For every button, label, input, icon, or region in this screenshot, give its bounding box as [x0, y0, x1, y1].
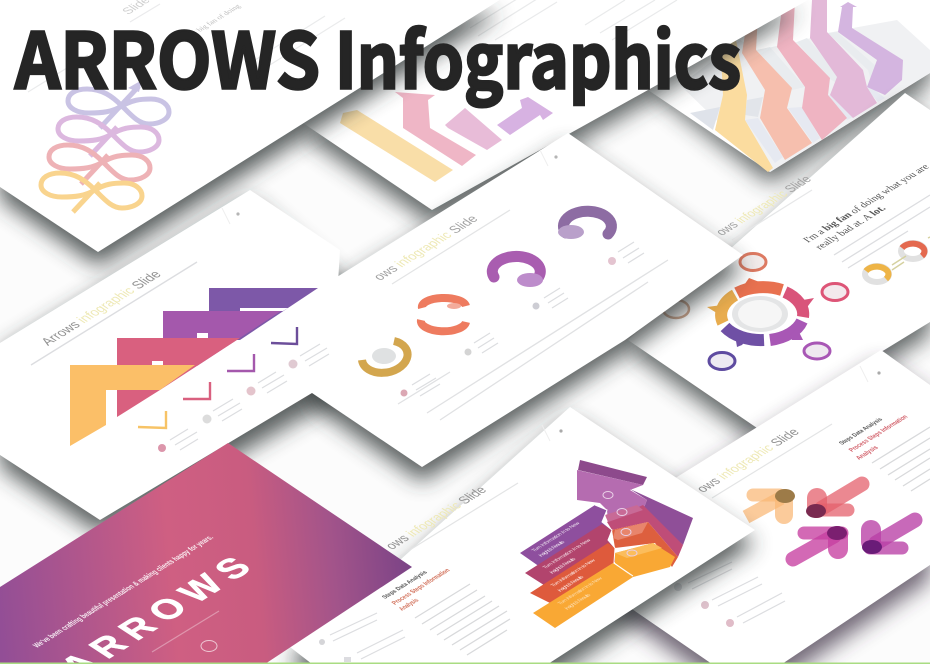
knot: pink: [49, 145, 150, 184]
slide: 3D stacked arrow: [290, 407, 755, 664]
step labels: [319, 613, 405, 662]
slide title: Arrows infographic Slide: [37, 268, 165, 348]
chevron labels: [158, 344, 329, 452]
ribbon text: Turn Information In to New: [531, 521, 582, 553]
ring: gold: [362, 341, 408, 373]
arrow group: purple: [862, 520, 915, 554]
ring: coral: [740, 254, 766, 270]
arrow: violet: [810, 0, 877, 118]
slide title: ows infographic Slide: [693, 426, 802, 495]
ribbon text: Turn Information In to New: [542, 538, 593, 570]
heading: process line 1: Process Steps Information: [848, 414, 910, 453]
ring: magenta: [492, 256, 543, 287]
ribbon: purple: [520, 505, 612, 567]
ring: magenta: [804, 343, 830, 359]
corner marks: [138, 327, 297, 428]
slide: rising arrows: [303, 0, 808, 224]
slide: tall zigzag arrows: [648, 0, 930, 184]
slide marker: [542, 425, 563, 441]
knot: lavender: [68, 86, 169, 128]
ribbon text: [531, 521, 604, 611]
step labels: [674, 562, 785, 627]
cover tagline: We've been crafting beautiful presentation & making clients happy for years.: [30, 533, 215, 649]
chevron: orange: [70, 365, 195, 446]
slide: circular wheel: [628, 93, 930, 442]
slide marker: [222, 208, 240, 224]
body lines: [415, 584, 510, 655]
chevron: rose: [117, 338, 240, 417]
3D arrow: [520, 460, 693, 628]
arrow group: orange: [746, 489, 795, 517]
ring: coral: [421, 298, 466, 331]
chevron: magenta: [163, 311, 281, 366]
heading: process line 2: Analysis: [855, 445, 880, 461]
body lines: [872, 427, 930, 491]
slide: C-shaped ring arrows: [300, 133, 743, 482]
knot: violet: [58, 117, 159, 156]
slide title: ows infographic Slide: [370, 213, 481, 283]
title: [14, 0, 741, 112]
chevron: purple: [209, 288, 318, 340]
arrow: rose: [777, 0, 847, 140]
title: ARROWS: [14, 0, 320, 112]
cover icon: [201, 640, 217, 652]
quote line 2: really bad at. A lot.: [813, 204, 889, 252]
slide title: ows infographic Slide: [382, 484, 490, 552]
ribbon: orange: [533, 563, 633, 628]
arrow: yellow: [715, 35, 773, 172]
ring: rose: [822, 284, 848, 300]
ribbon text: Insight & Results: [557, 575, 586, 593]
ribbon text: Insight & Results: [549, 557, 578, 575]
knot: orange: [41, 173, 142, 212]
ribbon text: Insight & Results: [564, 593, 593, 611]
ring: purple: [558, 211, 611, 239]
subtitle line: [31, 262, 197, 365]
slide quote: top left: big fan of doing: [194, 3, 243, 33]
ring: gold-brown partly hidden: [663, 300, 689, 318]
ring: purple: [709, 352, 735, 370]
ribbon text: Turn Information In to New: [557, 576, 604, 606]
arrow tip on lavender knot: [128, 80, 142, 92]
body lines: [834, 195, 930, 268]
slide title: ows infographic Slide: [712, 173, 815, 238]
paragraph lines: [398, 260, 668, 420]
heading: process line 2: Analysis: [398, 598, 421, 612]
donut labels: [892, 237, 930, 270]
slide: converging arrows: [600, 350, 930, 664]
arrow: salmon: [742, 7, 812, 160]
arrow group: magenta: [793, 526, 847, 559]
icon labels: [400, 242, 644, 396]
slide: chevron arrows: [0, 190, 340, 520]
heading: process line 1: Process Steps Information: [391, 568, 452, 606]
donut: coral: [901, 243, 925, 259]
arrow: lavender: [838, 2, 903, 95]
title: Infographics: [335, 0, 741, 112]
slide: infinity knots: [0, 0, 500, 266]
ribbon text: Turn Information In to New: [550, 558, 597, 588]
slide marker: [540, 150, 558, 166]
slide marker: [860, 366, 881, 382]
cover sub line: [152, 611, 219, 652]
slide: pink cover: [0, 443, 412, 664]
donut: gold: [865, 266, 889, 282]
wheel: [707, 278, 814, 347]
heading: steps: Steps Data Analysis: [381, 570, 429, 600]
bottom edge line: [0, 662, 930, 664]
heading: steps: Steps Data Analysis: [838, 417, 885, 446]
arrow group: coral: [806, 484, 862, 518]
ribbon: coral: [530, 543, 615, 603]
ribbon text: Insight & Results: [538, 540, 567, 558]
ribbon: crimson: [525, 524, 615, 587]
